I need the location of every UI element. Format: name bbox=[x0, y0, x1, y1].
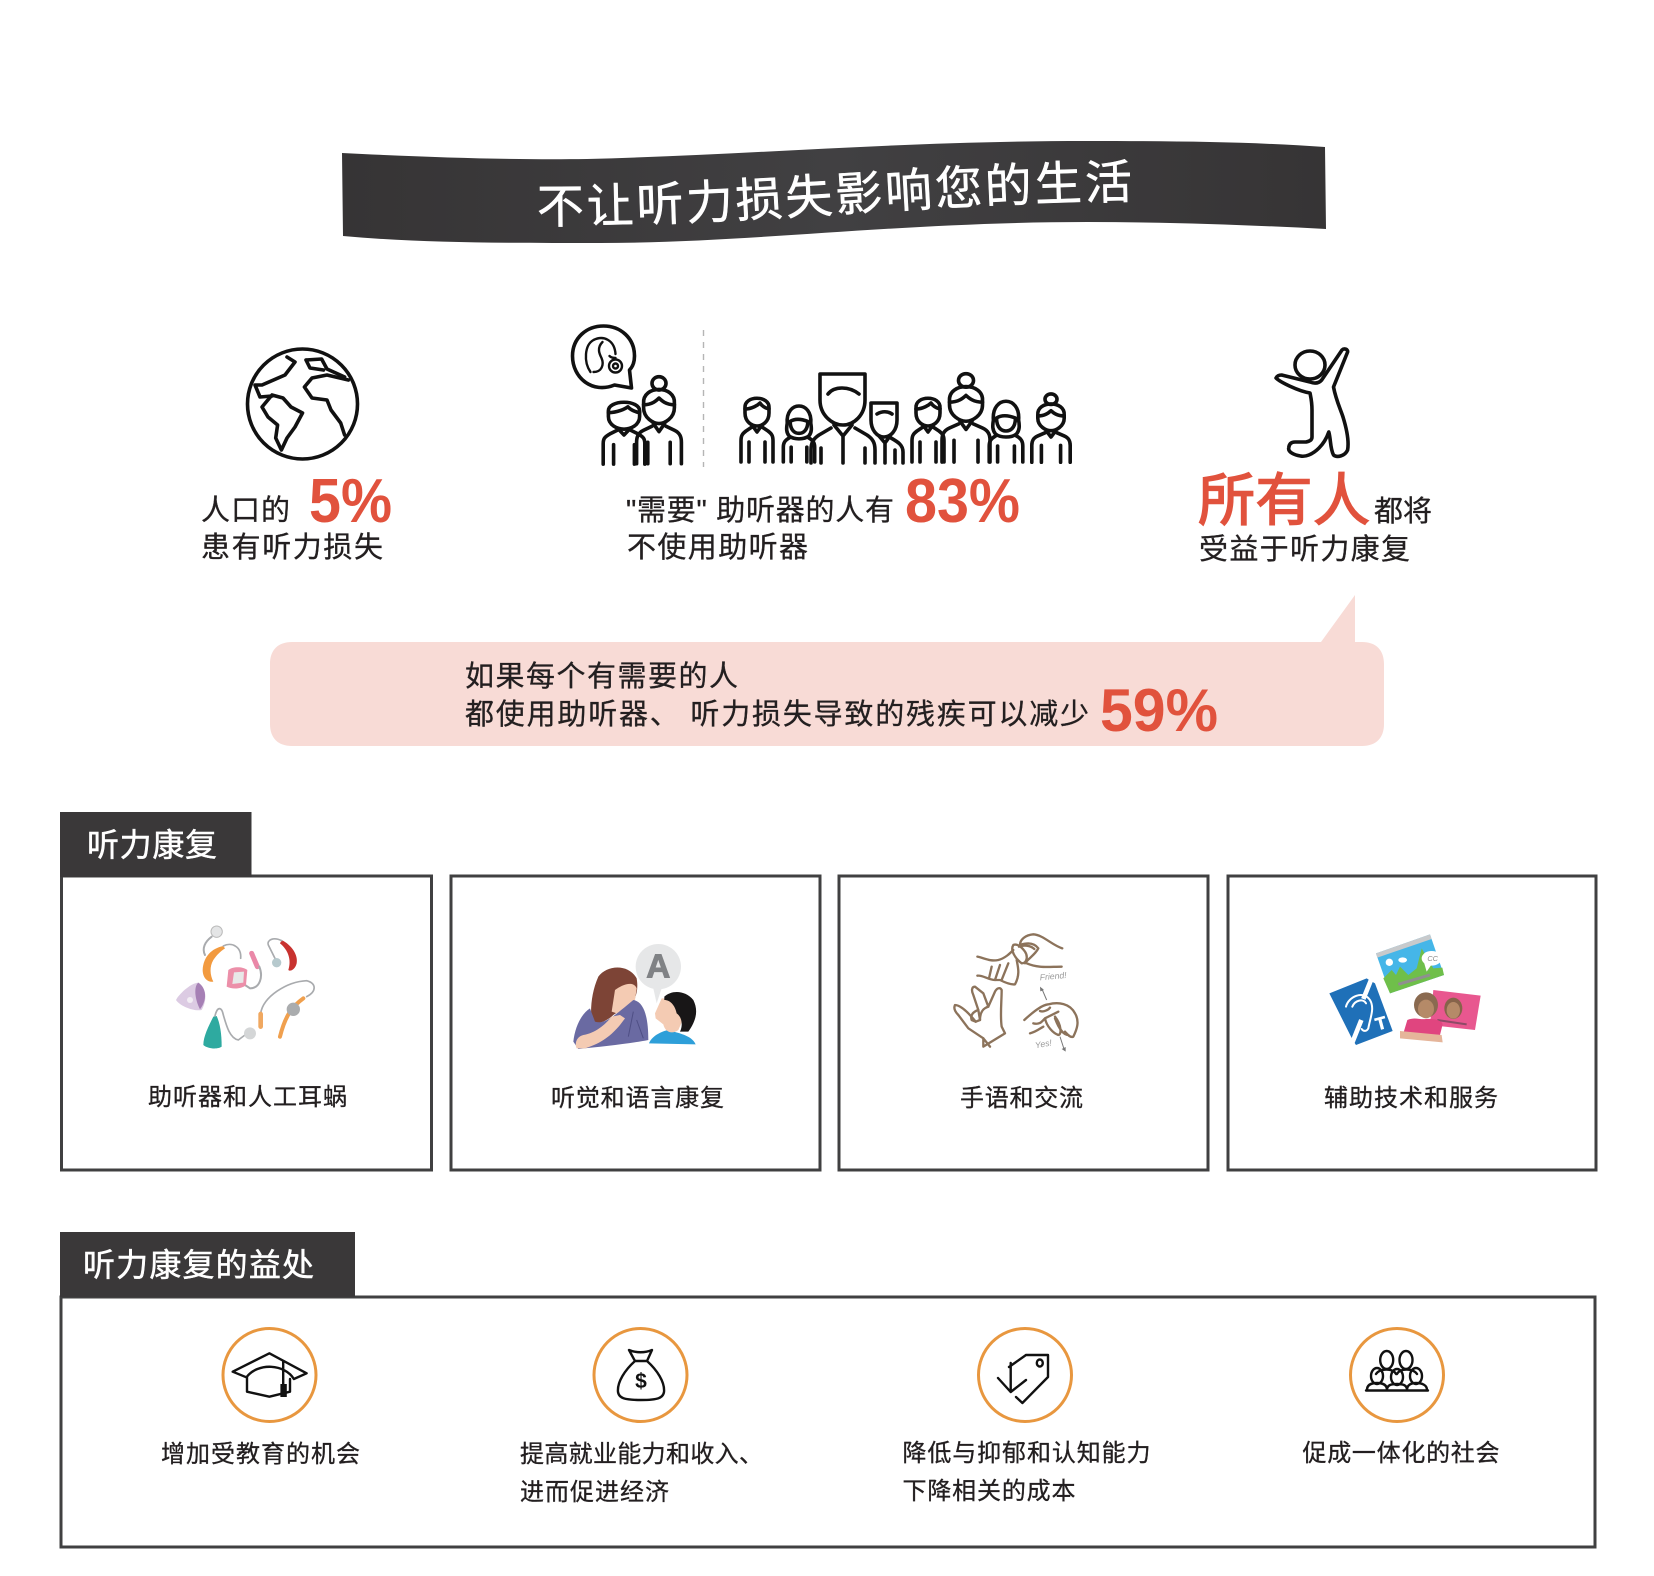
card label: 听觉和语言康复 bbox=[551, 1085, 724, 1112]
stat text: "需要" 助听器的人有 bbox=[626, 494, 894, 527]
stat number 83%: 83% bbox=[905, 467, 1020, 536]
icon: assistive technology bbox=[1329, 934, 1481, 1045]
stat number 5%: 5% bbox=[309, 467, 392, 536]
benefit label: 促成一体化的社会 bbox=[1302, 1440, 1500, 1467]
callout: 59 percent reduction bbox=[270, 595, 1384, 746]
stat text: 人口的 bbox=[201, 494, 290, 527]
icon: woman teaching child to speak bbox=[573, 944, 696, 1049]
section tab bbox=[60, 812, 252, 877]
icon: price tag with down arrow bbox=[978, 1328, 1072, 1422]
section tab bbox=[60, 1232, 355, 1297]
stat text: 都将 bbox=[1374, 495, 1432, 528]
benefit label line 2: 进而促进经济 bbox=[520, 1479, 669, 1506]
title: 不让听力损失影响您的生活 bbox=[538, 159, 1130, 227]
icon: hearing devices bbox=[176, 926, 314, 1048]
statistic: everyone benefits bbox=[1198, 349, 1432, 566]
card: auditory and speech rehabilitation bbox=[451, 876, 820, 1170]
card label: 助听器和人工耳蜗 bbox=[148, 1084, 347, 1111]
icon: two people who use hearing aids bbox=[603, 377, 681, 464]
callout text line 1: 如果每个有需要的人 bbox=[465, 660, 738, 693]
card label: 手语和交流 bbox=[960, 1085, 1083, 1112]
icon: speech bubble with hearing aid bbox=[572, 326, 634, 388]
icon: group of people bbox=[1350, 1328, 1444, 1422]
card: assistive technology and services bbox=[1228, 876, 1596, 1170]
caption label: CC bbox=[1427, 954, 1439, 963]
sign label: Friend! bbox=[1039, 970, 1068, 982]
stat text line 2: 不使用助听器 bbox=[627, 531, 808, 564]
callout text line 2: 都使用助听器、 听力损失导致的残疾可以减少 bbox=[465, 698, 1089, 731]
section: hearing rehabilitation bbox=[60, 812, 1596, 1170]
benefit: inclusive society bbox=[1302, 1328, 1500, 1467]
icon: money bag bbox=[594, 1328, 687, 1422]
section heading: 听力康复的益处 bbox=[83, 1247, 314, 1283]
card: hearing aids and cochlear implants bbox=[62, 876, 432, 1170]
title banner bbox=[342, 141, 1326, 243]
sign label: Yes! bbox=[1034, 1037, 1053, 1050]
section heading: 听力康复 bbox=[87, 827, 217, 863]
icon: graduation cap bbox=[223, 1328, 316, 1422]
stat text line 2: 患有听力损失 bbox=[201, 531, 383, 564]
icon: crowd of people bbox=[741, 374, 1070, 463]
benefit: employability bbox=[520, 1328, 763, 1506]
icon: money bag: $ bbox=[635, 1370, 647, 1393]
icon: assistive technology: T bbox=[1373, 1012, 1389, 1034]
benefit label: 提高就业能力和收入、 bbox=[520, 1441, 763, 1468]
benefit label: 增加受教育的机会 bbox=[161, 1441, 360, 1468]
card label: 辅助技术和服务 bbox=[1324, 1085, 1498, 1112]
benefit label: 降低与抑郁和认知能力 bbox=[902, 1440, 1150, 1467]
benefit: lower costs bbox=[902, 1328, 1150, 1505]
icon: woman teaching child to speak: A bbox=[646, 949, 670, 986]
benefit label line 2: 下降相关的成本 bbox=[902, 1478, 1076, 1505]
highlighted word: 所有人 bbox=[1198, 469, 1370, 533]
card: sign language and communication bbox=[839, 876, 1208, 1170]
stat text line 2: 受益于听力康复 bbox=[1199, 533, 1410, 566]
icon: globe bbox=[248, 349, 358, 459]
icon: jumping person bbox=[1276, 349, 1348, 456]
benefit: education bbox=[161, 1328, 360, 1468]
section: benefits of hearing rehabilitation bbox=[60, 1232, 1595, 1547]
benefits panel bbox=[61, 1297, 1595, 1547]
callout number 59%: 59% bbox=[1100, 677, 1218, 744]
icon: sign language hands bbox=[954, 934, 1078, 1052]
statistic: 83 percent do not use hearing aids bbox=[572, 326, 1070, 564]
statistic: 5 percent of population bbox=[201, 349, 392, 564]
